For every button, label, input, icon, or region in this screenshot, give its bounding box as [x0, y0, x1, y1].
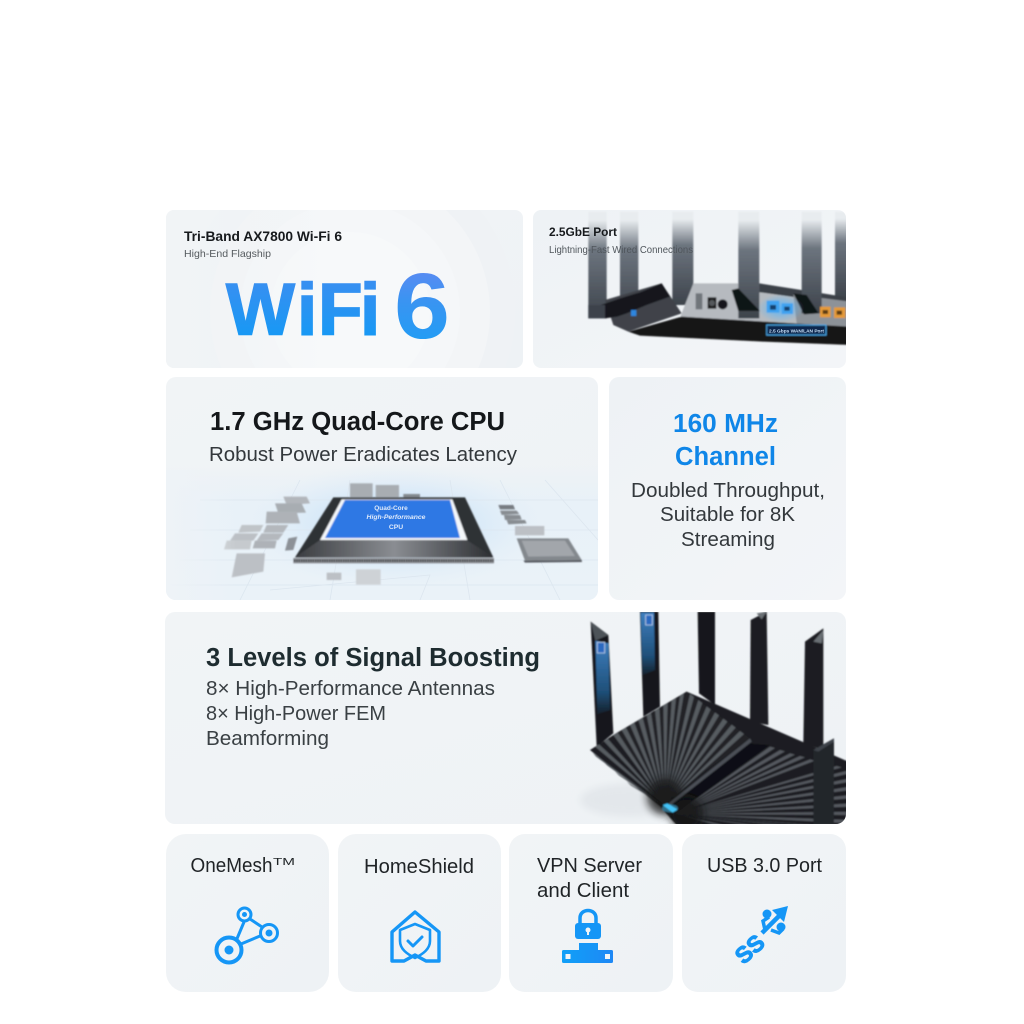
heading: 160 MHz Channel [673, 410, 778, 471]
panel: OneMesh [166, 834, 329, 992]
panel: 160 MHz Channel [609, 377, 846, 600]
label: VPN Server and Client: and Client [537, 879, 629, 902]
heading: 160 MHz Channel: Channel [675, 443, 776, 471]
icon: house with shield [392, 912, 439, 961]
panel: Wi-Fi 6 [166, 210, 523, 368]
logo: WiFi 6: i [297, 270, 317, 350]
panel: VPN [509, 834, 673, 992]
label: OneMesh: TM [273, 856, 295, 868]
text: channel description [631, 480, 825, 551]
heading: 1.7 GHz Quad-Core CPU: 1.7 GHz Quad-Core CPU [210, 408, 505, 436]
panel: Quad-Core CPU [166, 377, 600, 600]
chip label [367, 505, 426, 531]
panel: USB 3.0 Port [682, 834, 846, 992]
label: VPN Server and Client [537, 854, 642, 902]
label: HomeShield: HomeShield [364, 855, 474, 878]
logo: WiFi 6: F [318, 270, 363, 350]
text: channel description: Suitable for 8K [660, 504, 796, 526]
port label: 2.5 Gbps WAN/LAN Port [769, 328, 824, 334]
label: VPN Server and Client: VPN Server [537, 854, 642, 877]
logo: WiFi 6 [226, 254, 450, 358]
router front view [580, 612, 860, 830]
heading: Tri-Band AX7800 Wi-Fi 6: Tri-Band AX7800 Wi-Fi 6 [184, 229, 342, 244]
icon: SuperSpeed USB: SS [730, 929, 770, 969]
heading: 2.5GbE Port: 2.5GbE Port [549, 225, 617, 239]
text: signal boosting list: Beamforming [206, 727, 329, 750]
icon: lock on network bar [562, 910, 613, 963]
label: OneMesh: OneMesh [190, 854, 272, 877]
panel: HomeShield [338, 834, 501, 992]
chip label: High-Performance [367, 514, 426, 521]
chip label: Quad-Core [374, 505, 408, 512]
text: channel description: Doubled Throughput, [631, 480, 825, 502]
heading: 3 Levels of Signal Boosting: 3 Levels of Signal Boosting [206, 644, 540, 672]
logo: WiFi 6: W [226, 270, 295, 350]
fan texture: top plate [593, 693, 744, 805]
text: High-End Flagship: High-End Flagship [184, 248, 271, 260]
icon: mesh nodes [216, 908, 278, 962]
text: signal boosting list [206, 677, 495, 750]
heading: 160 MHz Channel: 160 MHz [673, 410, 778, 438]
text: channel description: Streaming [681, 529, 775, 551]
label: USB 3.0 Port: USB 3.0 Port [707, 854, 822, 877]
icon: SuperSpeed USB [730, 906, 788, 969]
text: Robust Power Eradicates Latency: Robust Power Eradicates Latency [209, 443, 518, 466]
logo: WiFi 6: i [360, 270, 380, 350]
chip label: CPU [389, 524, 403, 531]
fan texture: right plate [690, 746, 846, 824]
panel: 2.5GbE Port [533, 210, 852, 368]
text: Lightning-Fast Wired Connections: Lightning-Fast Wired Connections [549, 244, 693, 256]
panel: Signal Boosting [165, 612, 860, 830]
text: signal boosting list: 8× High-Power FEM [206, 702, 386, 725]
router rear view [588, 212, 852, 345]
illustration: CPU on circuit board [166, 463, 600, 600]
logo: WiFi 6: 6 [394, 254, 450, 358]
text: signal boosting list: 8× High-Performance Antennas [206, 677, 495, 700]
